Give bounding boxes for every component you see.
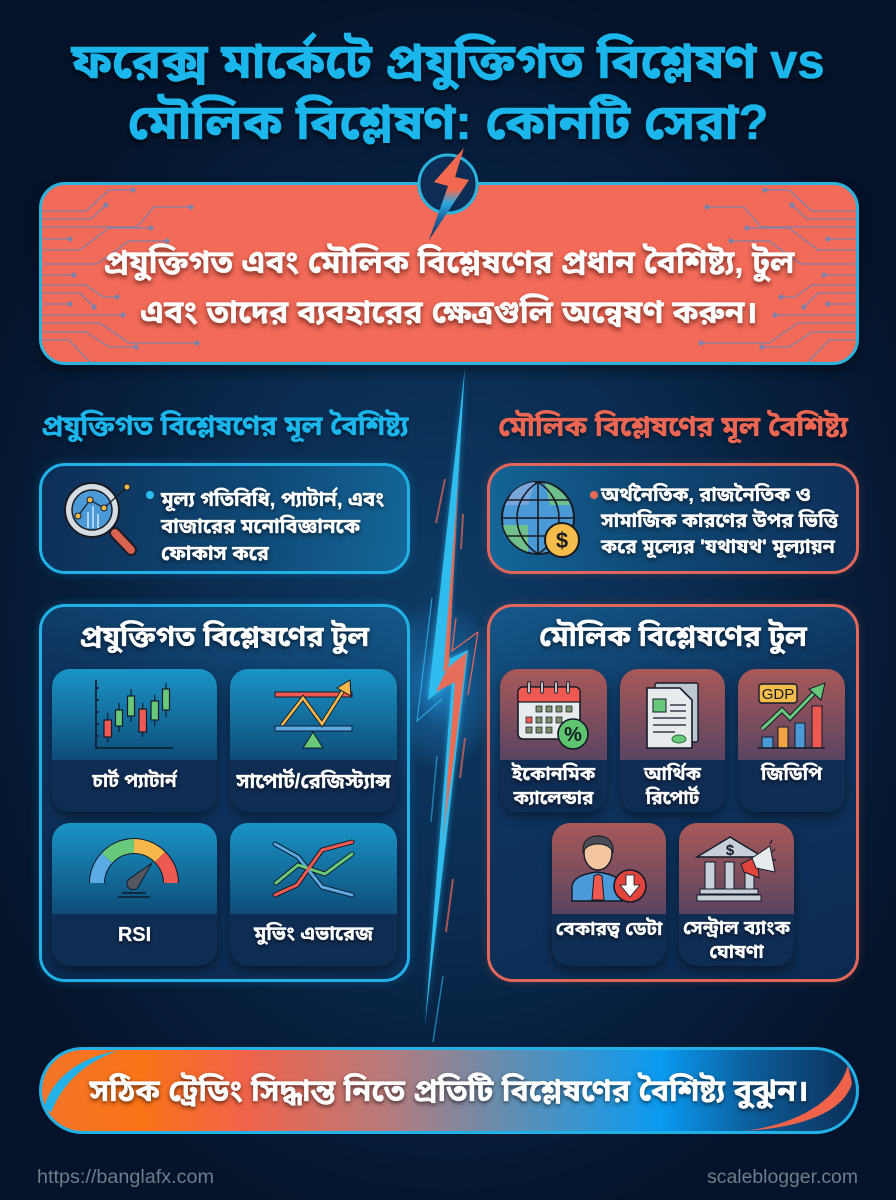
icon: GDP chart: GDP <box>762 686 794 703</box>
icon: calendar <box>517 681 589 750</box>
heading: technical tools: প্রযুক্তিগত বিশ্লেষণের টুল <box>80 621 369 653</box>
label: জিডিপি <box>761 764 822 785</box>
footer left url: https://banglafx.com <box>37 1166 214 1188</box>
panel: technical feature box <box>39 463 410 574</box>
feature text: ফোকাস করে <box>161 543 269 565</box>
panel: technical tools <box>39 604 410 982</box>
label <box>643 762 702 809</box>
circuit traces left and right <box>43 187 855 362</box>
central lightning divider <box>410 368 487 1042</box>
card: economic calendar <box>500 669 607 812</box>
card: RSI <box>52 823 217 966</box>
heading: fundamental tools: মৌলিক বিশ্লেষণের টুল <box>539 621 807 653</box>
icon: support and resistance <box>274 679 352 748</box>
label: রিপোর্ট <box>646 788 699 809</box>
feature text <box>159 486 386 565</box>
label: সেন্ট্রাল ব্যাংক <box>683 918 790 939</box>
heading: technical features: প্রযুক্তিগত বিশ্লেষণের মূল বৈশিষ্ট্য <box>42 410 408 441</box>
label: আর্থিক <box>644 764 701 785</box>
card: chart pattern <box>52 669 217 812</box>
icon: person with down arrow <box>571 835 647 903</box>
title <box>70 32 825 150</box>
label: মুভিং এভারেজ <box>254 923 373 945</box>
heading: fundamental features: মৌলিক বিশ্লেষণের মূল বৈশিষ্ট্য <box>498 410 848 442</box>
icon: documents <box>646 682 699 749</box>
bullet <box>590 491 598 499</box>
card: moving average <box>230 823 397 966</box>
icon: globe with coin: $ <box>556 528 568 553</box>
label: বেকারত্ব ডেটা <box>556 919 662 940</box>
bullet <box>146 491 154 499</box>
icon: bank and megaphone <box>694 836 776 902</box>
icon: moving average lines <box>272 840 354 898</box>
feature text: বাজারের মনোবিজ্ঞানকে <box>161 516 360 538</box>
feature text: অর্থনৈতিক, রাজনৈতিক ও <box>601 484 811 506</box>
icon: bank and megaphone: $ <box>726 842 735 859</box>
card: financial report <box>620 669 725 812</box>
panel: bottom banner <box>39 1047 859 1134</box>
label <box>510 762 596 809</box>
footer right url: scaleblogger.com <box>707 1166 858 1188</box>
title: ফরেক্স মার্কেটে প্রযুক্তিগত বিশ্লেষণ vs <box>71 35 825 89</box>
feature text: করে মূল্যের 'যথাযথ' মূল্যায়ন <box>601 536 835 558</box>
icon: candlesticks <box>95 680 173 749</box>
label: ক্যালেন্ডার <box>514 788 593 809</box>
label: চার্ট প্যাটার্ন <box>92 771 177 792</box>
card: support resistance <box>230 669 397 812</box>
label <box>682 916 791 963</box>
panel: fundamental feature box <box>487 463 859 574</box>
feature text: সামাজিক কারণের উপর ভিত্তি <box>601 510 838 532</box>
icon: globe with coin <box>501 481 580 558</box>
label: সাপোর্ট/রেজিস্ট্যান্স <box>236 771 391 793</box>
intro text: এবং তাদের ব্যবহারের ক্ষেত্রগুলি অন্বেষণ করুন। <box>140 294 758 330</box>
label: ইকোনমিক <box>512 764 595 785</box>
decorative swooshes <box>44 1051 852 1131</box>
feature text <box>599 482 840 562</box>
label: ঘোষণা <box>709 942 764 963</box>
icon: gauge <box>89 838 179 898</box>
panel: fundamental tools <box>487 604 859 982</box>
icon: lightning badge <box>418 148 478 240</box>
card: unemployment data <box>552 823 666 966</box>
card: GDP <box>738 669 845 812</box>
icon: calendar: % <box>564 724 582 746</box>
card: central bank <box>679 823 794 966</box>
label: RSI <box>118 924 151 946</box>
title: মৌলিক বিশ্লেষণ: কোনটি সেরা? <box>128 96 768 150</box>
feature text: মূল্য গতিবিধি, প্যাটার্ন, এবং <box>161 489 384 511</box>
intro text <box>102 243 798 333</box>
icon: magnifier chart <box>64 482 137 556</box>
intro text: প্রযুক্তিগত এবং মৌলিক বিশ্লেষণের প্রধান বৈশিষ্ট্য, টুল <box>104 244 794 280</box>
banner text: সঠিক ট্রেডিং সিদ্ধান্ত নিতে প্রতিটি বিশ্লেষণের বৈশিষ্ট্য বুঝুন। <box>90 1074 808 1108</box>
panel: intro banner <box>39 182 859 365</box>
icon: GDP chart <box>758 682 826 749</box>
